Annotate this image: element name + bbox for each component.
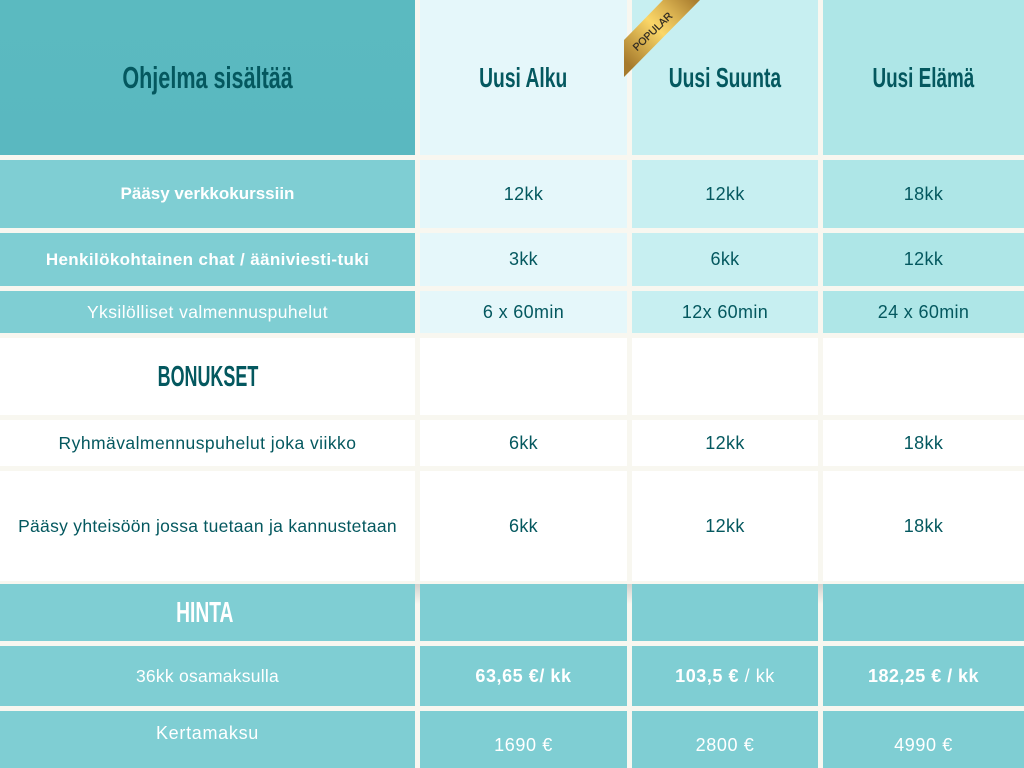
row: Pääsy yhteisöön: 18kk: [904, 516, 943, 536]
row: 36kk osamaksulla: 103,5 € / kk: [675, 666, 775, 686]
row: 36kk osamaksulla: 36kk osamaksulla: [136, 666, 279, 686]
heading: Uusi Alku: Uusi Alku: [479, 62, 568, 94]
row: Henkilökohtainen chat: 3kk: [509, 249, 538, 269]
row: Kertamaksu: Kertamaksu: [156, 723, 259, 743]
row: Yksilölliset valmennuspuhelut: Yksilölliset valmennuspuhelut: [87, 302, 328, 322]
row: Yksilölliset valmennuspuhelut: 12x 60min: [682, 302, 768, 322]
header row: [0, 0, 1024, 155]
row: Yksilölliset valmennuspuhelut: 6 x 60min: [483, 302, 564, 322]
row: Pääsy verkkokurssiin: [0, 160, 1024, 228]
row: Pääsy verkkokurssiin: Pääsy verkkokurssiin: [121, 184, 294, 203]
row: 36kk osamaksulla: [0, 646, 1024, 706]
heading: Uusi Suunta: Uusi Suunta: [669, 62, 781, 94]
row: 36kk osamaksulla: 63,65 €/ kk: [475, 666, 572, 686]
row: Pääsy yhteisöön: 12kk: [705, 516, 745, 536]
row: Pääsy verkkokurssiin: 18kk: [904, 184, 943, 204]
heading: Uusi Alku: [420, 0, 627, 155]
row: Pääsy verkkokurssiin: 12kk: [705, 184, 745, 204]
row: Henkilökohtainen chat: Henkilökohtainen chat / ääniviesti-tuki: [46, 250, 369, 268]
heading: Ohjelma sisältää: [0, 0, 415, 155]
row: HINTA: [0, 584, 1024, 641]
heading: Ohjelma sisältää: Ohjelma sisältää: [122, 61, 293, 95]
heading: Uusi Suunta: [632, 0, 818, 155]
row: Ryhmävalmennuspuhelut: 18kk: [904, 433, 943, 453]
row: Henkilökohtainen chat: 12kk: [904, 249, 943, 269]
row: BONUKSET: BONUKSET: [157, 359, 258, 393]
row: Kertamaksu: 2800 €: [696, 735, 754, 755]
row: Kertamaksu: 1690 €: [494, 735, 553, 755]
row: Pääsy yhteisöön: [0, 471, 1024, 581]
row: 36kk osamaksulla: 182,25 € / kk: [868, 666, 979, 686]
row: Yksilölliset valmennuspuhelut: [0, 291, 1024, 333]
icon: POPULAR ribbon: POPULAR: [631, 10, 675, 54]
row: HINTA: HINTA: [176, 595, 233, 629]
row: Kertamaksu: 4990 €: [894, 735, 953, 755]
row: BONUKSET: [0, 338, 1024, 415]
row: Pääsy verkkokurssiin: 12kk: [504, 184, 543, 204]
row: Ryhmävalmennuspuhelut: 12kk: [705, 433, 745, 453]
row: Yksilölliset valmennuspuhelut: 24 x 60min: [878, 302, 969, 322]
row: Pääsy yhteisöön: 6kk: [509, 516, 538, 536]
row: Henkilökohtainen chat: [0, 233, 1024, 286]
row: Henkilökohtainen chat: 6kk: [710, 249, 740, 269]
row: Kertamaksu: [0, 711, 1024, 768]
row: Ryhmävalmennuspuhelut: [0, 420, 1024, 466]
icon: POPULAR ribbon: [624, 0, 700, 77]
heading: Uusi Elämä: Uusi Elämä: [873, 62, 974, 94]
row: Ryhmävalmennuspuhelut: 6kk: [509, 433, 538, 453]
row: Pääsy yhteisöön: Pääsy yhteisöön jossa tuetaan ja kannustetaan: [18, 516, 397, 536]
heading: Uusi Elämä: [823, 0, 1024, 155]
row: Ryhmävalmennuspuhelut: Ryhmävalmennuspuhelut joka viikko: [59, 433, 356, 453]
